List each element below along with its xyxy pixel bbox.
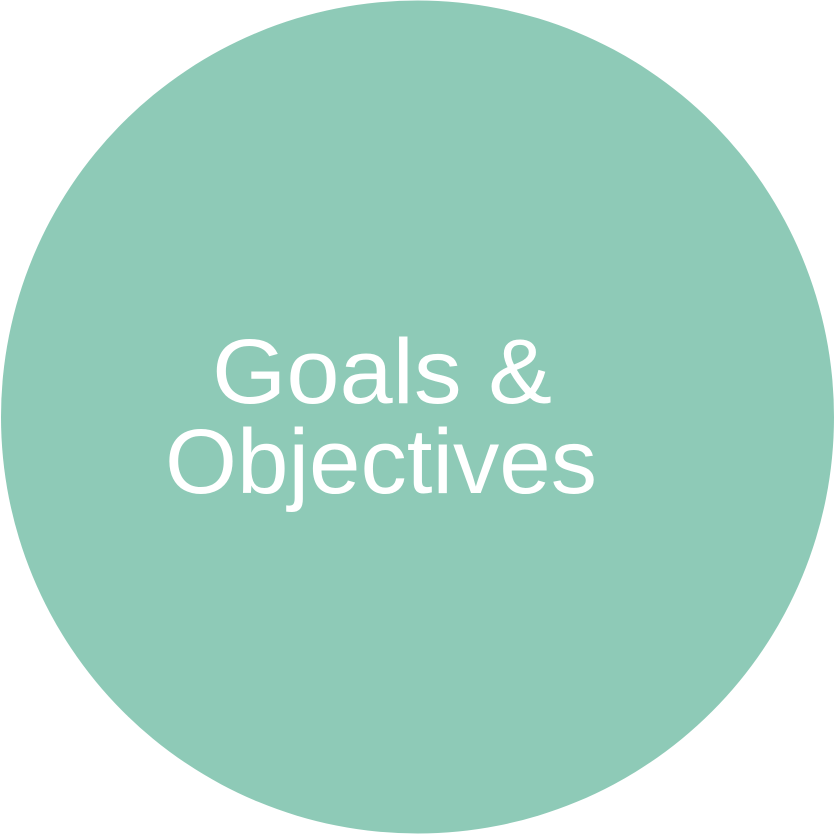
title: Objectives	[165, 411, 597, 513]
title: Goals &	[212, 321, 552, 423]
title	[165, 321, 597, 513]
